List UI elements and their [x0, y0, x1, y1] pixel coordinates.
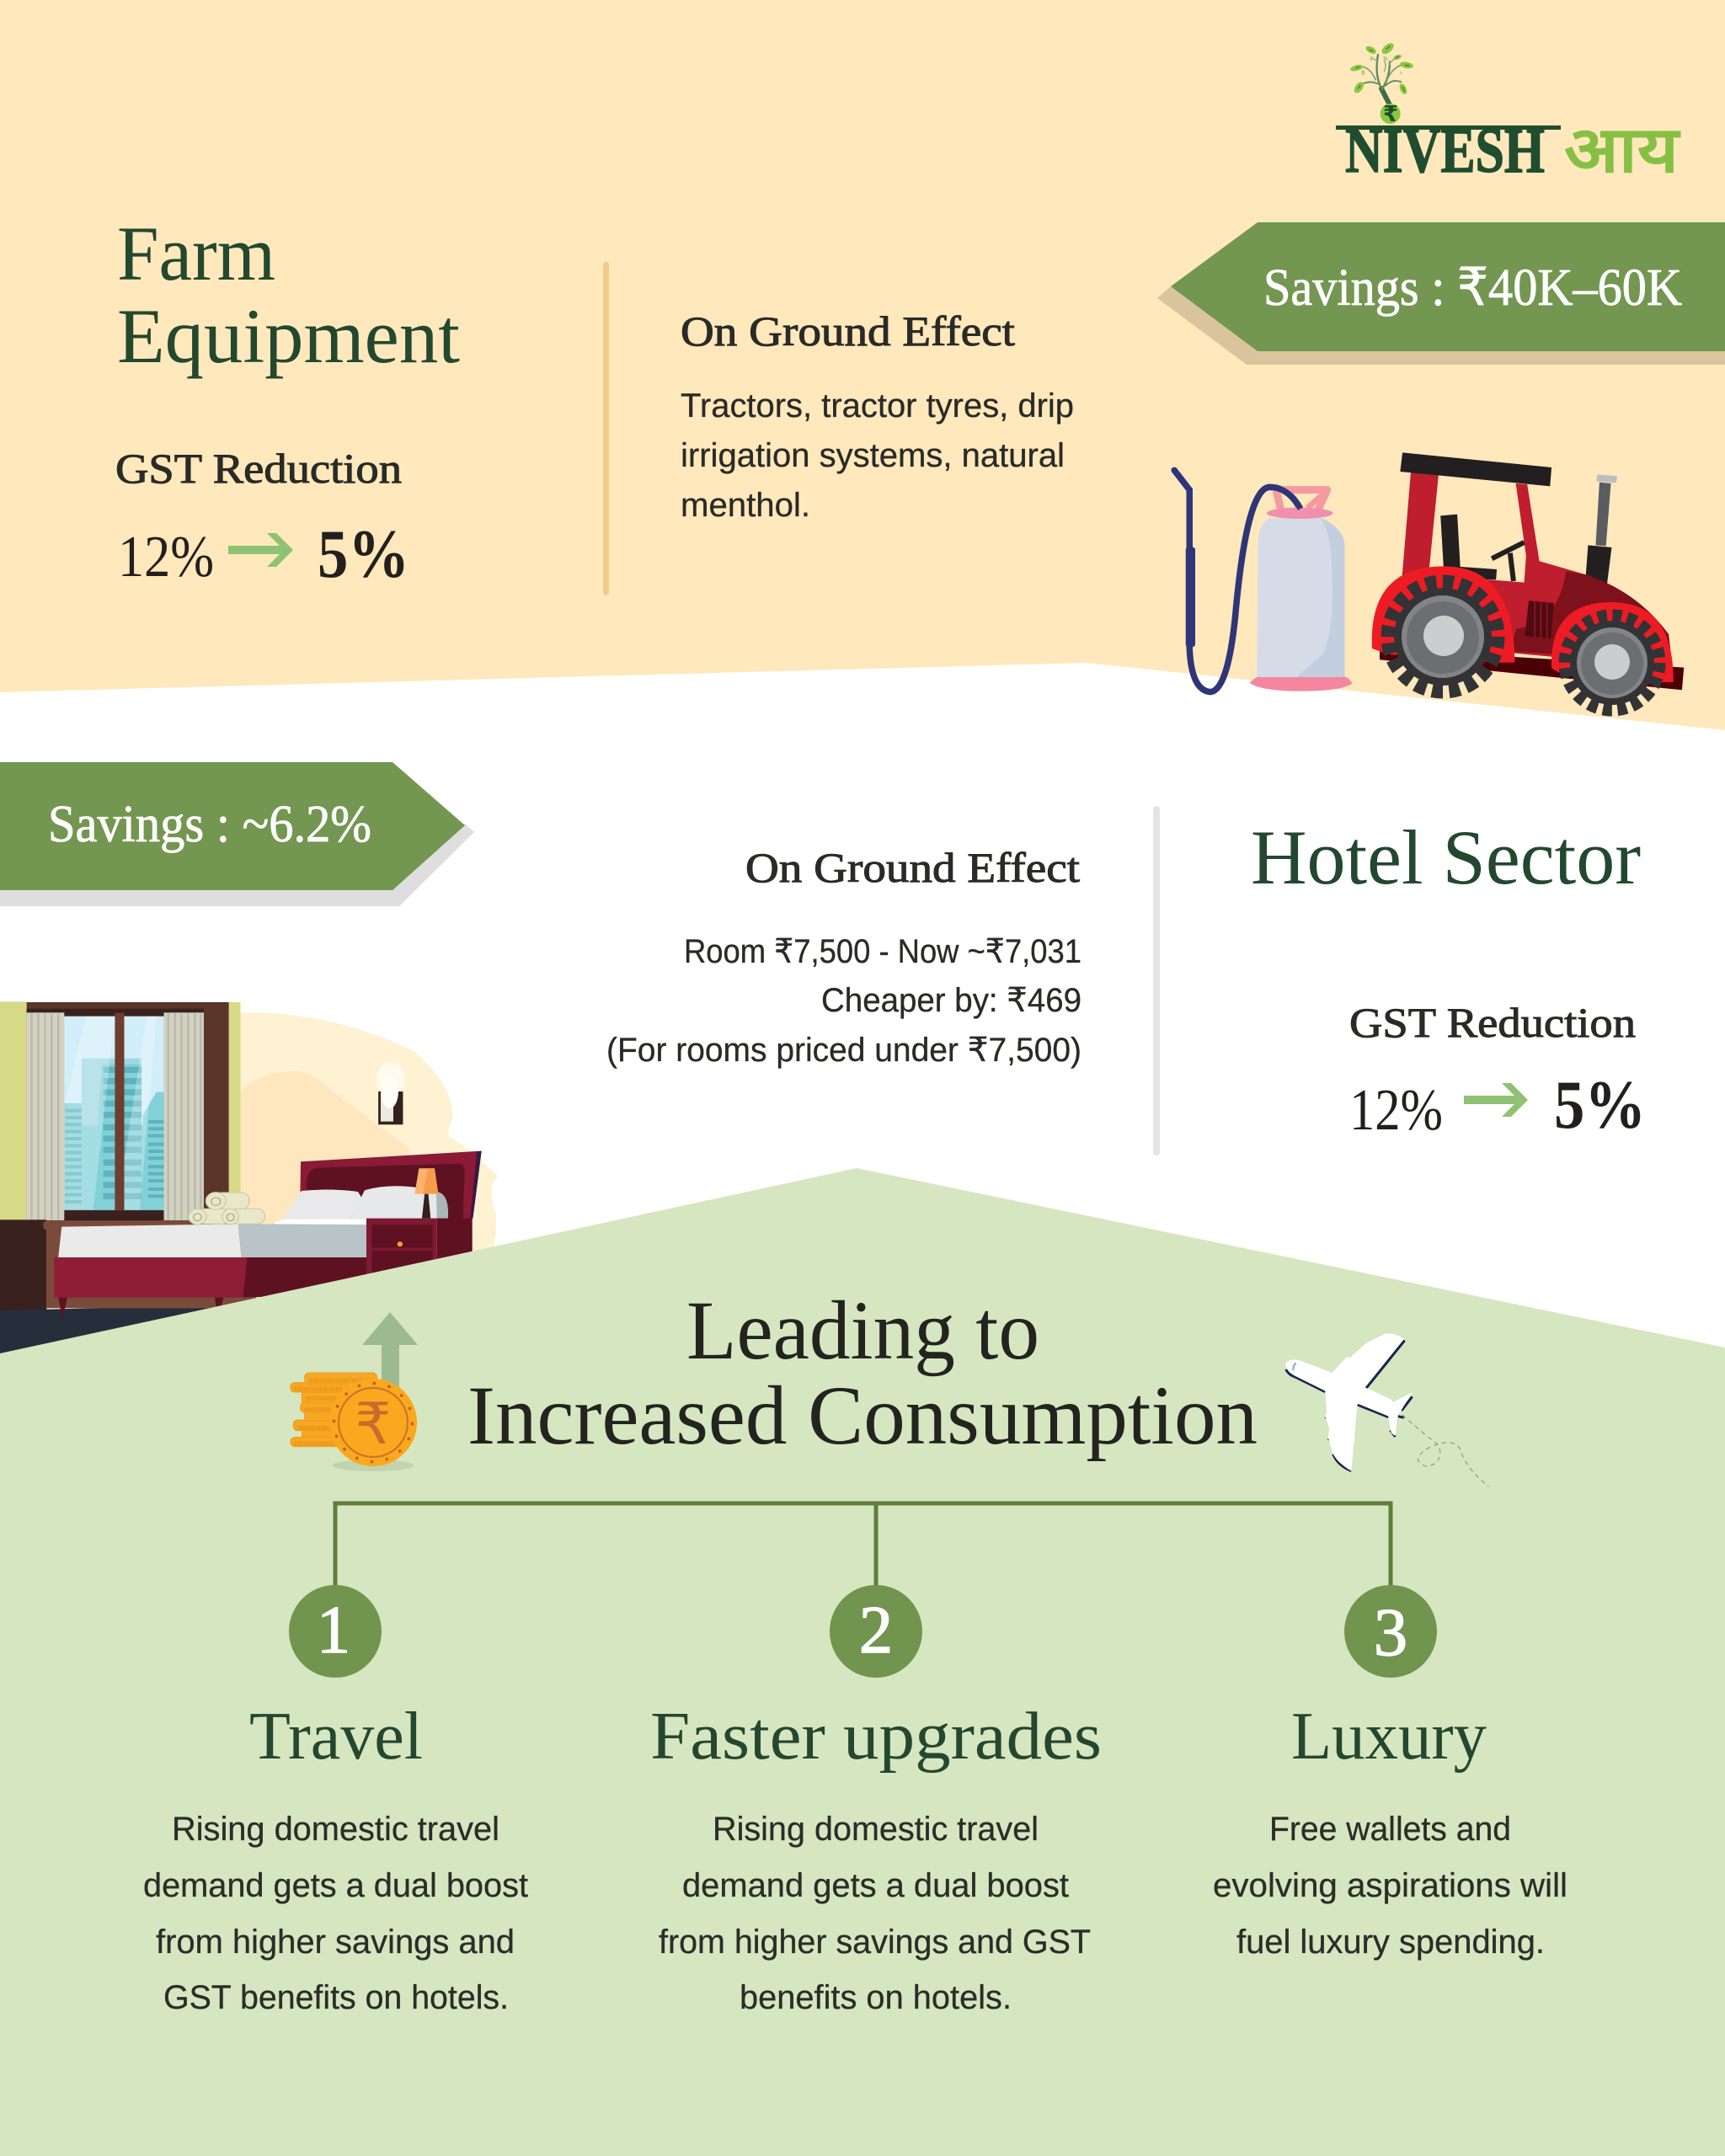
panel: farm equipment: [0, 0, 1725, 730]
divider: [1153, 806, 1160, 1155]
heading: On Ground Effect: On Ground Effect: [681, 307, 1015, 355]
savings banner: [1157, 222, 1725, 365]
large coin: [329, 1379, 417, 1466]
body text: fuel luxury spending.: [1236, 1924, 1545, 1961]
rate change: 12% to 5%: 5%: [318, 515, 409, 592]
column: luxury: [1213, 1585, 1567, 1961]
large coin: ₹: [355, 1392, 392, 1456]
rate change: 12% to 5%: [1349, 1066, 1646, 1143]
heading: Leading to Increased Consumption: [467, 1283, 1258, 1462]
arrow: [228, 533, 293, 567]
body text: effects: [606, 933, 1081, 1069]
body text: demand gets a dual boost: [682, 1867, 1069, 1904]
rate change: 12% to 5%: [118, 515, 409, 592]
logo bar: [1336, 125, 1561, 130]
icon: rupee seed: ₹: [1383, 102, 1398, 127]
body text: benefits on hotels.: [740, 1979, 1012, 2016]
body text: effects: irrigation systems, natural: [681, 437, 1065, 474]
icon: rupee coins with arrow: [291, 1312, 418, 1471]
body text: effects: menthol.: [681, 487, 810, 524]
body text: [659, 1811, 1091, 2016]
icon: money tree: [1349, 41, 1414, 124]
illustration: hotel room: [0, 1001, 498, 1390]
rate change: 12% to 5%: 5%: [1554, 1066, 1646, 1143]
body text: demand gets a dual boost: [143, 1867, 528, 1904]
rate change: 12% to 5%: 12%: [118, 525, 214, 590]
label: GST Reduction: GST Reduction: [115, 445, 402, 492]
icon: sprayer: [1174, 470, 1352, 692]
heading: Faster upgrades: [650, 1700, 1102, 1774]
heading: On Ground Effect: On Ground Effect: [745, 844, 1080, 891]
heading: Luxury: [1291, 1700, 1487, 1774]
number badge: 1: [317, 1593, 350, 1668]
heading: Farm Equipment: Equipment: [117, 293, 460, 379]
banner shadow: [0, 824, 474, 906]
heading: Leading to Increased Consumption: Increased Consumption: [467, 1369, 1258, 1462]
body text: effects: Room ₹7,500 - Now ~₹7,031: [684, 933, 1081, 970]
body text: [1213, 1811, 1567, 1961]
peach background: [0, 0, 1725, 730]
number badge: [1344, 1585, 1437, 1678]
panel: hotel sector: [0, 762, 1646, 1390]
green background: [0, 1168, 1725, 2156]
body text: effects: [681, 387, 1074, 524]
connector lines: [335, 1503, 1391, 1587]
body text: GST benefits on hotels.: [163, 1979, 509, 2016]
column: travel: [143, 1585, 528, 2016]
logo hindi wordmark: आय: [1564, 115, 1681, 186]
body text: Rising domestic travel: [172, 1811, 499, 1848]
rate change: 12% to 5%: 12%: [1349, 1078, 1443, 1143]
number badge: [830, 1585, 922, 1678]
banner shape: [1171, 222, 1725, 351]
arrow up: [362, 1312, 418, 1398]
icon: airplane: [1285, 1333, 1488, 1486]
heading: Leading to Increased Consumption: Leading to: [686, 1283, 1039, 1377]
icon: tractor: [1372, 452, 1684, 710]
number badge: [289, 1585, 382, 1678]
number badge: 2: [859, 1593, 893, 1668]
heading: Travel: [249, 1700, 423, 1774]
arrow: [1464, 1083, 1528, 1117]
heading: Farm Equipment: [117, 211, 460, 379]
body text: effects: Tractors, tractor tyres, drip: [681, 387, 1074, 424]
body text: Rising domestic travel: [713, 1811, 1039, 1848]
body text: from higher savings and: [156, 1924, 515, 1961]
heading: Farm Equipment: Farm: [117, 211, 275, 296]
rear tyre: [1565, 616, 1659, 710]
number badge: 3: [1374, 1596, 1407, 1670]
banner shadow: [1157, 286, 1725, 365]
body text: from higher savings and GST: [659, 1924, 1091, 1961]
coin stack: [291, 1373, 377, 1447]
front tyre: [1388, 582, 1498, 691]
divider: [603, 262, 609, 595]
body text: Free wallets and: [1269, 1811, 1511, 1848]
column: faster upgrades: [650, 1585, 1102, 2016]
body text: effects: Cheaper by: ₹469: [821, 982, 1081, 1019]
body text: effects: (For rooms priced under ₹7,500): [606, 1032, 1081, 1069]
banner shape: [0, 762, 465, 890]
logo wordmark: NIVESH: [1345, 115, 1545, 186]
heading: Hotel Sector: Hotel Sector: [1251, 814, 1641, 900]
body text: [143, 1811, 528, 2016]
body text: evolving aspirations will: [1213, 1867, 1567, 1904]
banner text: Savings : ₹40K–60K: [1263, 259, 1682, 317]
logo: Nivesh Aay: [1336, 41, 1681, 186]
panel: increased consumption: [0, 1168, 1725, 2156]
shadow: [333, 1460, 414, 1471]
banner text: Savings : ~6.2%: [48, 796, 371, 853]
savings banner: [0, 762, 474, 906]
label: GST Reduction: GST Reduction: [1349, 999, 1636, 1046]
